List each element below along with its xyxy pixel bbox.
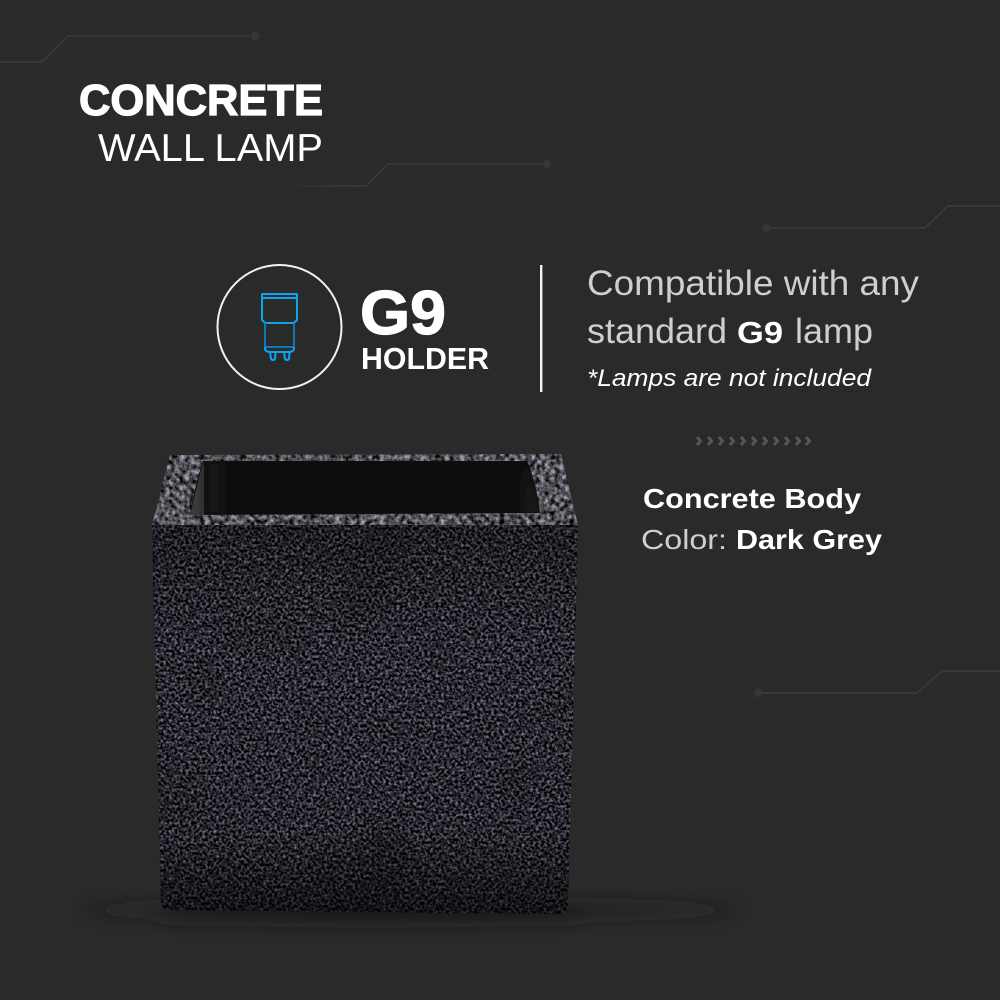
compatibility text: standard (587, 312, 727, 351)
lamp front face (150, 525, 580, 917)
divider (540, 265, 542, 392)
circuit line: upper right (762, 206, 1000, 232)
circuit line: lower right (754, 671, 1000, 697)
compatibility text: *Lamps are not included (587, 365, 872, 392)
lamp floor shadow (80, 905, 740, 921)
title (79, 76, 323, 170)
compatibility text: lamp (795, 312, 873, 351)
holder label: HOLDER (361, 341, 489, 376)
lamp opening (190, 461, 540, 515)
G9 label: G9 (360, 279, 446, 348)
G9 holder badge (218, 265, 489, 389)
product: concrete lamp (150, 453, 580, 917)
circuit line: top left (0, 32, 260, 62)
title: CONCRETE (79, 76, 323, 125)
compatibility text (587, 264, 920, 392)
title: WALL LAMP (98, 127, 323, 170)
body colour text (641, 483, 882, 555)
body colour text: Color: (641, 524, 727, 555)
lamp top rim (150, 453, 580, 526)
compatibility text: G9 (737, 315, 783, 350)
icon: G9 bulb (262, 294, 297, 360)
compatibility text: Compatible with any (587, 264, 920, 303)
icon circle (218, 265, 342, 389)
body colour text: Concrete Body (643, 483, 861, 514)
chevron divider (697, 437, 810, 445)
body colour text: Dark Grey (736, 524, 882, 555)
circuit line: under title (275, 160, 551, 186)
